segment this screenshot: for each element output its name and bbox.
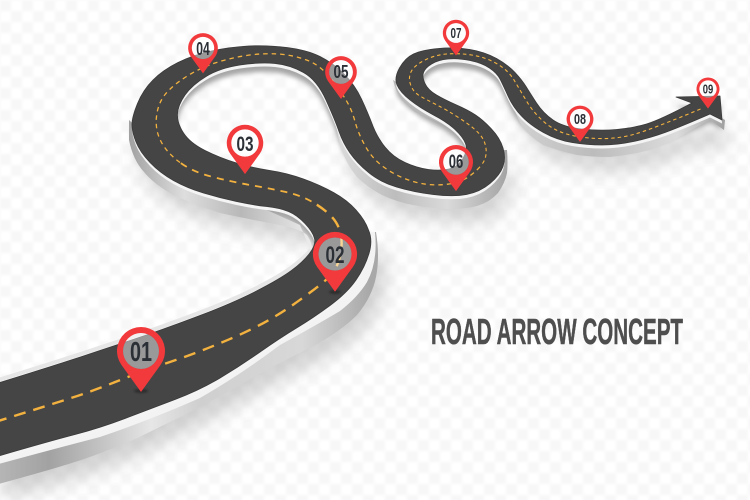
marker 01: [117, 327, 165, 393]
marker 06: [439, 145, 473, 191]
marker 04: [188, 33, 218, 73]
near-side edge lip: [0, 250, 311, 381]
asphalt surface: [0, 46, 722, 457]
marker 01: 01: [130, 336, 152, 367]
white edge lip under the road: [0, 49, 722, 460]
marker 07: [443, 20, 469, 56]
marker 08: [567, 106, 593, 142]
inner wall shade: [0, 55, 722, 466]
marker 03: [227, 125, 263, 174]
upper S wall: [393, 80, 470, 150]
marker 02: 02: [326, 242, 344, 269]
marker 09: [696, 77, 720, 109]
loop wall: [129, 120, 312, 254]
marker 05: [325, 56, 357, 99]
middle S wall: [334, 110, 508, 209]
lane dashes: [0, 54, 703, 422]
front wall highlight lip: [0, 232, 376, 465]
arrow wall: [507, 88, 725, 157]
front wall of the road: [0, 232, 378, 485]
marker 04: 04: [196, 39, 210, 59]
marker 05: 05: [334, 62, 348, 82]
road ground shadow: [3, 104, 732, 499]
marker 08: 08: [574, 111, 586, 128]
marker 03: 03: [236, 133, 254, 156]
marker 06: 06: [449, 152, 463, 173]
marker 07: 07: [450, 25, 462, 42]
marker 02: [313, 232, 357, 294]
marker 09: 09: [703, 82, 713, 96]
